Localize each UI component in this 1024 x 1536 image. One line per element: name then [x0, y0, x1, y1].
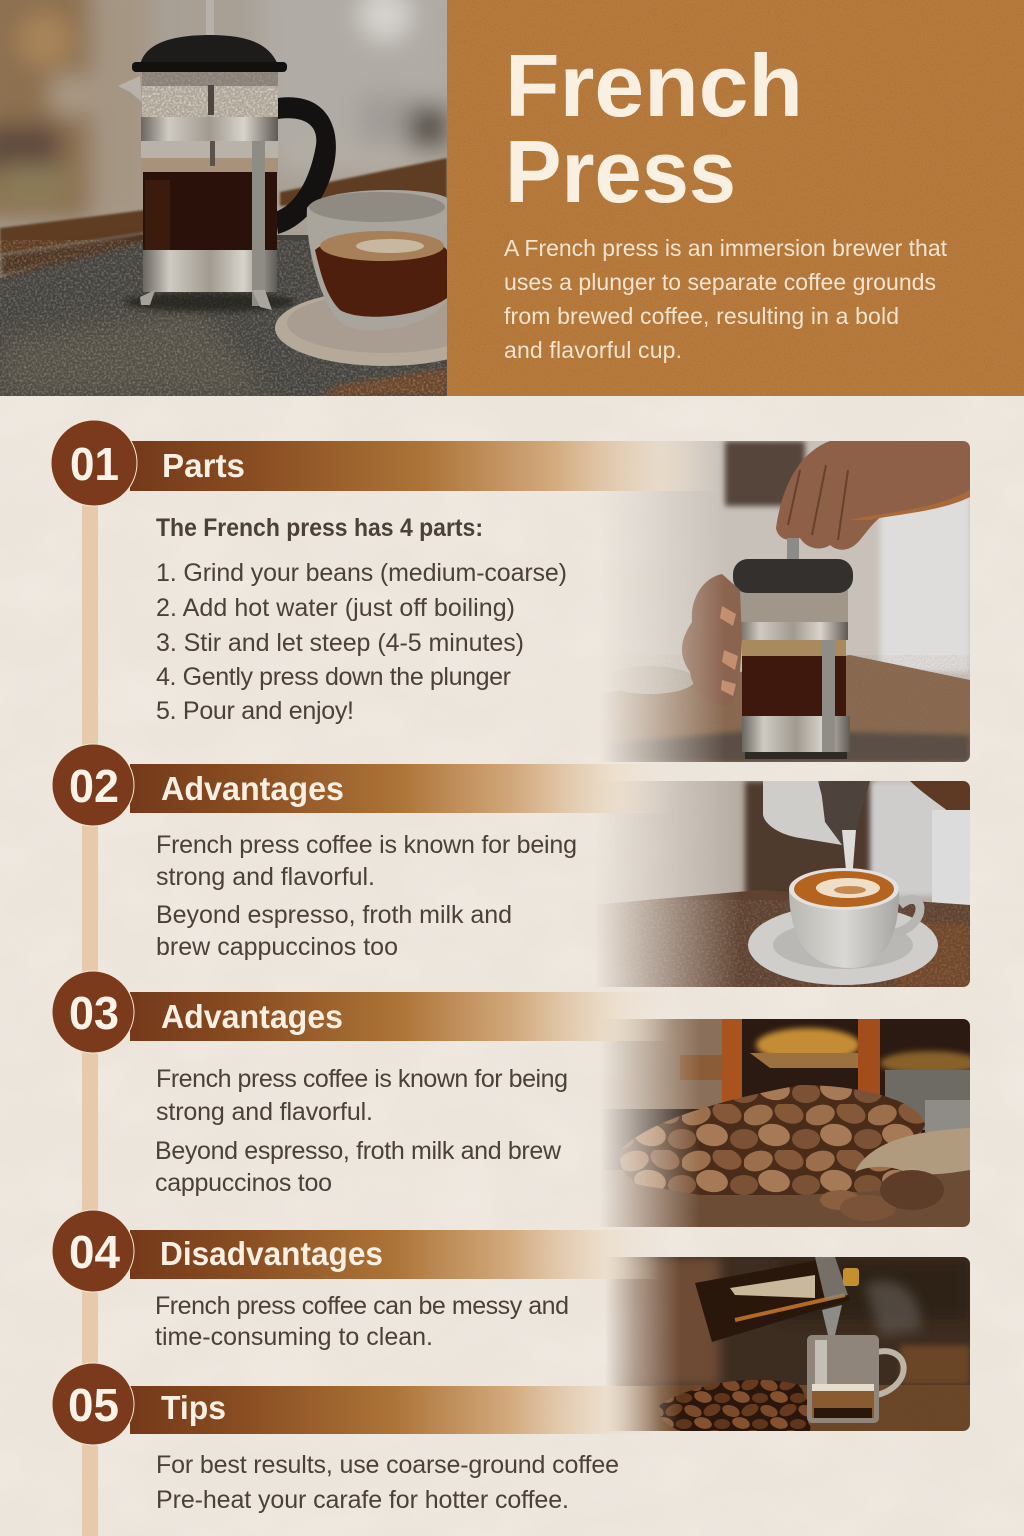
description: uses a plunger to separate coffee grounds — [504, 269, 936, 295]
tips text — [156, 1451, 619, 1514]
disadvantages text — [155, 1292, 569, 1351]
title: French — [505, 36, 803, 135]
saucer — [275, 296, 447, 366]
disadvantages text: French press coffee can be messy and — [155, 1292, 569, 1320]
number badge 04: 04 — [69, 1226, 120, 1278]
table — [590, 1170, 970, 1227]
advantages text: French press coffee is known for being — [156, 1065, 568, 1093]
saucer — [748, 905, 938, 985]
header band 05 — [130, 1386, 660, 1434]
heading: Advantages: Advantages — [161, 998, 343, 1035]
steam — [865, 1281, 921, 1335]
gold beans — [752, 1024, 858, 1053]
number badge 03 — [52, 971, 134, 1053]
number badge 05 — [52, 1363, 134, 1445]
heading: Tips: Tips — [161, 1389, 226, 1426]
parts list: 2. Add hot water (just off boiling) — [156, 594, 515, 622]
section 04 photo: pouring into mug — [590, 1257, 970, 1431]
advantages text: brew cappuccinos too — [156, 933, 398, 961]
section 02 photo: latte pour — [590, 781, 970, 987]
number badge 05: 05 — [68, 1379, 119, 1431]
section 01 photo: hands pressing plunger — [590, 441, 970, 762]
section 03 — [52, 971, 670, 1197]
header band 04 — [130, 1230, 660, 1279]
disadvantages text: time-consuming to clean. — [155, 1323, 433, 1351]
parts list: 4. Gently press down the plunger — [156, 663, 511, 691]
header band 02 — [130, 764, 670, 813]
section 02 — [52, 744, 670, 961]
description — [504, 235, 948, 363]
tips text: Pre-heat your carafe for hotter coffee. — [156, 1486, 569, 1514]
title: Press — [505, 122, 736, 221]
title — [505, 36, 803, 221]
heading: Disadvantages: Disadvantages — [160, 1235, 383, 1272]
advantages text: French press coffee is known for being — [156, 831, 577, 859]
number badge 04 — [52, 1210, 134, 1292]
cup — [895, 899, 920, 933]
heading: Parts: Parts — [162, 447, 245, 484]
copper pillars — [722, 1019, 742, 1104]
number badge 02: 02 — [69, 760, 119, 812]
number badge 02 — [52, 744, 134, 826]
header band 01 — [130, 441, 720, 491]
tilted press — [695, 1257, 850, 1342]
glass mug — [877, 1351, 904, 1395]
description: and flavorful cup. — [504, 337, 682, 363]
number badge 01 — [51, 420, 137, 506]
number badge 01: 01 — [70, 438, 119, 490]
description: A French press is an immersion brewer that — [504, 235, 948, 261]
advantages text: Beyond espresso, froth milk and — [156, 901, 512, 929]
hand left — [682, 574, 742, 684]
header band 03 — [130, 992, 670, 1041]
hand above — [776, 441, 970, 550]
tips text: For best results, use coarse-ground coffee — [156, 1451, 619, 1479]
jar — [885, 1070, 970, 1130]
title panel — [447, 0, 1024, 396]
section 01 — [51, 420, 720, 725]
section 04 — [52, 1210, 660, 1351]
advantages text: Beyond espresso, froth milk and brew — [155, 1137, 562, 1165]
stone table — [0, 235, 447, 396]
parts list: 5. Pour and enjoy! — [156, 697, 354, 725]
heading: Advantages: Advantages — [161, 770, 344, 807]
burlap sack — [855, 1128, 970, 1174]
advantages text — [156, 831, 577, 961]
advantages text: cappuccinos too — [155, 1169, 332, 1197]
press — [125, 292, 295, 312]
advantages text — [155, 1065, 568, 1197]
bean pile — [620, 1085, 925, 1195]
hero photo: French press and glass cup — [0, 0, 495, 396]
section 03 photo: coffee beans and burlap — [590, 1019, 980, 1227]
description: from brewed coffee, resulting in a bold — [504, 303, 899, 329]
wooden tray — [0, 158, 447, 254]
parts list — [156, 514, 567, 725]
press — [787, 538, 799, 559]
milk stream — [842, 830, 856, 868]
parts list: The French press has 4 parts: — [156, 514, 483, 542]
milk pitcher — [763, 781, 842, 845]
parts list: 3. Stir and let steep (4-5 minutes) — [156, 629, 524, 657]
number badge 03: 03 — [69, 987, 119, 1039]
table — [590, 1385, 970, 1431]
section 05 — [52, 1363, 660, 1514]
glass cup — [307, 190, 447, 331]
parts list: 1. Grind your beans (medium-coarse) — [156, 559, 567, 587]
advantages text: strong and flavorful. — [156, 863, 375, 891]
timeline line — [82, 490, 98, 1536]
bean pile — [659, 1380, 812, 1431]
advantages text: strong and flavorful. — [156, 1098, 373, 1126]
